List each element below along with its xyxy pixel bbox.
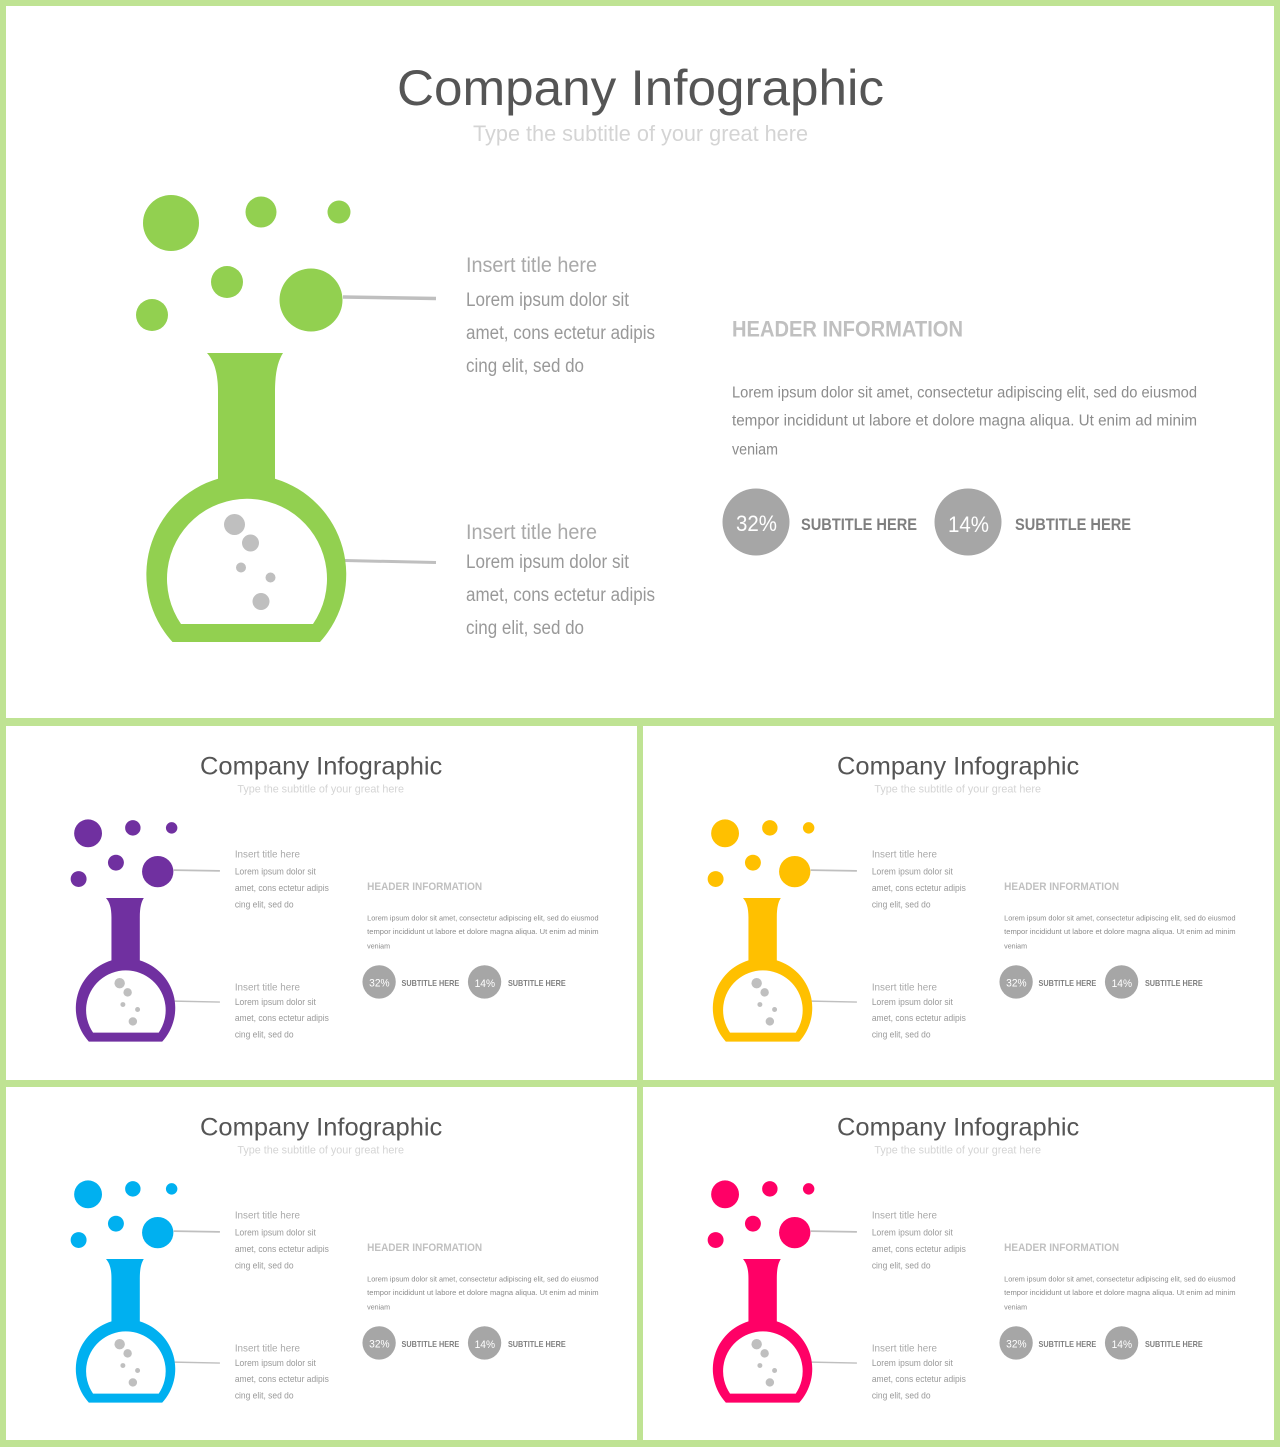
body paragraph: Lorem ipsum dolor sit amet, consectetur adipiscing elit, sed do eiusmod	[1004, 913, 1236, 922]
text block: upper callout: cing elit, sed do	[235, 899, 294, 910]
text block: upper callout: Lorem ipsum dolor sit	[872, 867, 953, 878]
text block: upper callout: Lorem ipsum dolor sit	[466, 290, 630, 311]
title: Company Infographic	[200, 753, 442, 781]
text block: upper callout: Insert title here	[872, 1211, 937, 1222]
body paragraph: veniam	[1004, 942, 1027, 951]
stat: 32%	[722, 488, 917, 556]
stat: 32%: 32%	[369, 977, 390, 989]
text block: lower callout: cing elit, sed do	[235, 1030, 294, 1041]
stat: 14%	[1105, 965, 1203, 999]
text block: upper callout: cing elit, sed do	[872, 899, 931, 910]
body paragraph: veniam	[1004, 1303, 1027, 1312]
text block: upper callout: amet, cons ectetur adipis	[466, 323, 655, 344]
header information: HEADER INFORMATION	[367, 1242, 482, 1254]
connector line: lower	[175, 1361, 220, 1365]
stat: 14%: SUBTITLE HERE	[508, 978, 566, 988]
stat: 14%	[468, 1326, 566, 1360]
connector line: upper	[343, 297, 436, 298]
panel: purple slide	[6, 726, 637, 1080]
stat: 14%: 14%	[475, 1339, 495, 1351]
text block: upper callout: cing elit, sed do	[872, 1260, 931, 1271]
title: Company Infographic	[397, 60, 884, 116]
connector line: lower	[812, 1000, 857, 1004]
text block: upper callout: cing elit, sed do	[235, 1260, 294, 1271]
text block: lower callout: cing elit, sed do	[872, 1391, 931, 1402]
text block: lower callout: Lorem ipsum dolor sit	[235, 997, 316, 1008]
text block: lower callout: cing elit, sed do	[235, 1391, 294, 1402]
text block: upper callout	[872, 850, 966, 910]
text block: upper callout: Insert title here	[235, 1211, 300, 1222]
text block: upper callout: amet, cons ectetur adipis	[872, 883, 966, 894]
body paragraph: Lorem ipsum dolor sit amet, consectetur adipiscing elit, sed do eiusmod	[367, 913, 599, 922]
text block: upper callout: amet, cons ectetur adipis	[872, 1244, 966, 1255]
subtitle: Type the subtitle of your great here	[237, 784, 404, 796]
connector line: upper	[811, 868, 857, 873]
subtitle: Type the subtitle of your great here	[237, 1145, 404, 1157]
stat: 14%: SUBTITLE HERE	[508, 1339, 566, 1349]
stat: 32%: SUBTITLE HERE	[401, 978, 460, 988]
body paragraph: tempor incididunt ut labore et dolore magna aliqua. Ut enim ad minim	[732, 412, 1197, 430]
stat: 14%: 14%	[948, 512, 989, 537]
stat: 32%: 32%	[1006, 977, 1027, 989]
stat: 32%	[362, 965, 460, 999]
connector line: upper	[811, 1229, 857, 1234]
connector line: lower	[812, 1361, 857, 1365]
text block: lower callout: Lorem ipsum dolor sit	[235, 1358, 316, 1369]
text block: lower callout: amet, cons ectetur adipis	[235, 1013, 329, 1024]
subtitle: Type the subtitle of your great here	[473, 121, 808, 146]
text block: lower callout	[235, 982, 329, 1041]
title: Company Infographic	[837, 753, 1079, 781]
stat: 32%	[999, 1326, 1097, 1360]
panel: pink slide	[643, 1087, 1274, 1440]
stat: 32%	[362, 1326, 460, 1360]
text block: lower callout: cing elit, sed do	[872, 1030, 931, 1041]
stat: 14%: 14%	[1112, 1339, 1132, 1351]
body paragraph: Lorem ipsum dolor sit amet, consectetur adipiscing elit, sed do eiusmod	[367, 1274, 599, 1283]
stat: 14%: 14%	[475, 978, 495, 990]
text block: lower callout: amet, cons ectetur adipis	[872, 1013, 966, 1024]
icon: flask	[146, 353, 346, 642]
stat: 14%: 14%	[1112, 978, 1132, 990]
body paragraph	[1004, 913, 1236, 951]
stat: 32%	[999, 965, 1097, 999]
stat: 32%: SUBTITLE HERE	[1038, 1339, 1097, 1349]
text block: upper callout: amet, cons ectetur adipis	[235, 883, 329, 894]
text block: lower callout	[466, 521, 655, 639]
rising bubbles	[708, 1180, 814, 1248]
stat: 32%: SUBTITLE HERE	[1038, 978, 1097, 988]
connector line: upper	[174, 1229, 220, 1234]
body paragraph	[1004, 1274, 1236, 1312]
text block: upper callout	[466, 254, 655, 377]
body paragraph: tempor incididunt ut labore et dolore magna aliqua. Ut enim ad minim	[367, 1288, 599, 1297]
body paragraph: tempor incididunt ut labore et dolore magna aliqua. Ut enim ad minim	[1004, 927, 1236, 936]
rising bubbles	[71, 819, 177, 887]
text block: upper callout: Insert title here	[235, 850, 300, 861]
text block: upper callout: Insert title here	[466, 254, 597, 277]
text block: lower callout: Insert title here	[872, 982, 937, 993]
icon: flask	[713, 898, 812, 1042]
text block: upper callout	[235, 1211, 329, 1271]
header information: HEADER INFORMATION	[1004, 881, 1119, 893]
subtitle: Type the subtitle of your great here	[874, 1145, 1041, 1157]
connector line: lower	[175, 1000, 220, 1004]
body paragraph: tempor incididunt ut labore et dolore magna aliqua. Ut enim ad minim	[1004, 1288, 1236, 1297]
text block: upper callout	[872, 1211, 966, 1271]
stat: 32%: SUBTITLE HERE	[801, 515, 917, 534]
icon: flask	[76, 898, 175, 1042]
text block: lower callout: Insert title here	[235, 1343, 300, 1354]
flask inner bubbles	[114, 978, 140, 1026]
text block: lower callout: Insert title here	[872, 1343, 937, 1354]
title: Company Infographic	[200, 1114, 442, 1142]
text block: lower callout	[872, 982, 966, 1041]
text block: upper callout: Lorem ipsum dolor sit	[872, 1228, 953, 1239]
connector line: upper	[174, 868, 220, 873]
subtitle: Type the subtitle of your great here	[874, 784, 1041, 796]
text block: lower callout: Lorem ipsum dolor sit	[466, 552, 630, 573]
text block: upper callout: Lorem ipsum dolor sit	[235, 1228, 316, 1239]
text block: upper callout: amet, cons ectetur adipis	[235, 1244, 329, 1255]
flask inner bubbles	[114, 1339, 140, 1387]
stat: 32%: 32%	[1006, 1338, 1027, 1350]
body paragraph: Lorem ipsum dolor sit amet, consectetur adipiscing elit, sed do eiusmod	[732, 384, 1197, 402]
body paragraph: veniam	[367, 1303, 390, 1312]
icon: flask	[713, 1259, 812, 1403]
text block: lower callout: amet, cons ectetur adipis	[872, 1374, 966, 1385]
stat: 32%: 32%	[736, 511, 777, 536]
stat: 14%: SUBTITLE HERE	[1145, 978, 1203, 988]
stat: 14%: SUBTITLE HERE	[1145, 1339, 1203, 1349]
text block: lower callout: cing elit, sed do	[466, 618, 584, 639]
stat: 14%: SUBTITLE HERE	[1015, 515, 1131, 534]
text block: lower callout: Lorem ipsum dolor sit	[872, 997, 953, 1008]
panel: yellow slide	[643, 726, 1274, 1080]
flask inner bubbles	[751, 1339, 777, 1387]
text block: lower callout: Insert title here	[235, 982, 300, 993]
body paragraph	[732, 384, 1197, 458]
text block: upper callout: Lorem ipsum dolor sit	[235, 867, 316, 878]
rising bubbles	[708, 819, 814, 887]
text block: lower callout: amet, cons ectetur adipis	[466, 585, 655, 606]
text block: lower callout: amet, cons ectetur adipis	[235, 1374, 329, 1385]
stat: 14%	[468, 965, 566, 999]
flask inner bubbles	[751, 978, 777, 1026]
stat: 14%	[934, 488, 1131, 556]
connector line: lower	[345, 560, 436, 562]
stat: 32%: SUBTITLE HERE	[401, 1339, 460, 1349]
body paragraph	[367, 1274, 599, 1312]
text block: lower callout: Insert title here	[466, 521, 597, 544]
body paragraph	[367, 913, 599, 951]
panel: blue slide	[6, 1087, 637, 1440]
text block: upper callout	[235, 850, 329, 910]
stat: 14%	[1105, 1326, 1203, 1360]
text block: lower callout: Lorem ipsum dolor sit	[872, 1358, 953, 1369]
rising bubbles	[136, 195, 350, 332]
body paragraph: veniam	[367, 942, 390, 951]
text block: upper callout: cing elit, sed do	[466, 356, 584, 377]
body paragraph: veniam	[732, 442, 778, 458]
body paragraph: tempor incididunt ut labore et dolore magna aliqua. Ut enim ad minim	[367, 927, 599, 936]
text block: lower callout	[235, 1343, 329, 1402]
header information: HEADER INFORMATION	[732, 316, 963, 342]
text block: lower callout	[872, 1343, 966, 1402]
title: Company Infographic	[837, 1114, 1079, 1142]
rising bubbles	[71, 1180, 177, 1248]
stat: 32%: 32%	[369, 1338, 390, 1350]
body paragraph: Lorem ipsum dolor sit amet, consectetur adipiscing elit, sed do eiusmod	[1004, 1274, 1236, 1283]
text block: upper callout: Insert title here	[872, 850, 937, 861]
icon: flask	[76, 1259, 175, 1403]
header information: HEADER INFORMATION	[367, 881, 482, 893]
panel: green main slide	[6, 6, 1274, 718]
header information: HEADER INFORMATION	[1004, 1242, 1119, 1254]
flask inner bubbles	[224, 514, 276, 610]
